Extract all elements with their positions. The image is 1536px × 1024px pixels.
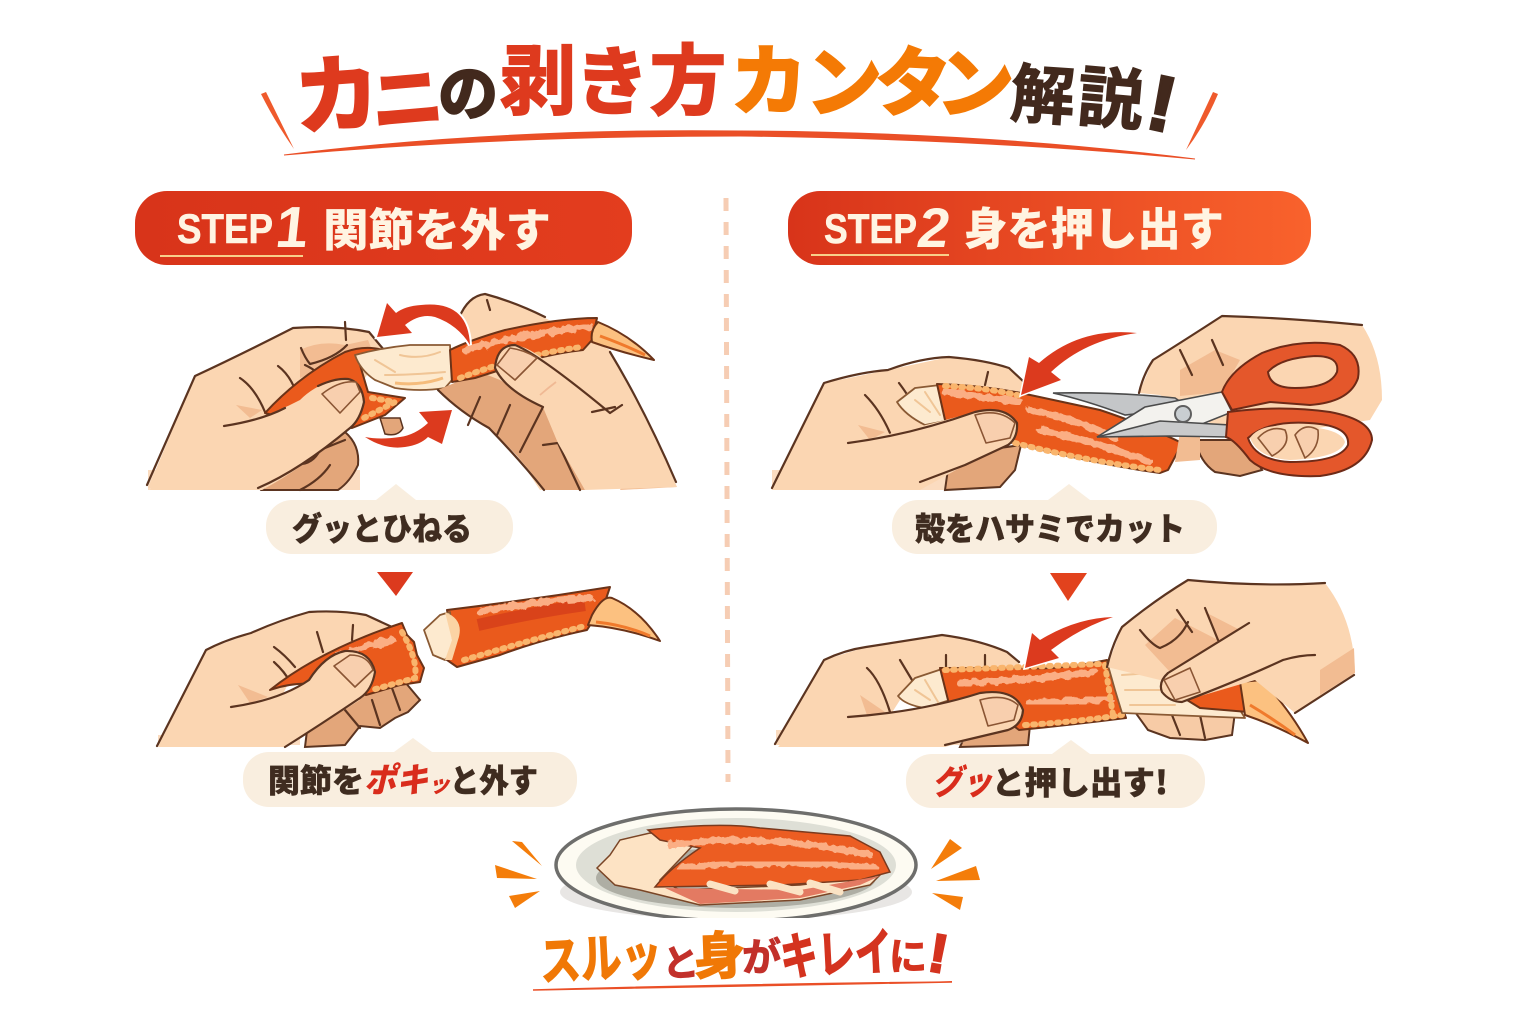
title: カニの剥き方カンタン解説!: 剥 bbox=[500, 40, 576, 125]
held crab shell bbox=[270, 623, 424, 695]
panel: step 1 header: 1 bbox=[273, 195, 312, 260]
illustration: plate with crab meat bbox=[556, 809, 916, 926]
panel: step 2 header: STEP bbox=[824, 205, 917, 252]
result text: スルッと身がキレイに!: が bbox=[742, 937, 781, 980]
right thumb bbox=[495, 345, 677, 490]
left hand holding shell bbox=[157, 611, 420, 747]
panel: step 1 twist illustration bbox=[147, 294, 677, 490]
title: カニの剥き方カンタン解説!: き bbox=[575, 41, 649, 124]
twist arrows bbox=[365, 303, 470, 448]
result text: スルッと身がキレイに!: スルッ bbox=[539, 928, 663, 992]
bent finger behind bbox=[380, 418, 403, 435]
crab shell left bbox=[265, 348, 405, 428]
left thumb bbox=[775, 410, 1017, 490]
plate bbox=[556, 809, 916, 926]
title: カニの剥き方カンタン解説!: 解 bbox=[1008, 58, 1077, 134]
callout: グッとひねる: グッとひねる bbox=[292, 504, 472, 550]
arrow: step 1 down bbox=[377, 572, 413, 596]
callout: 関節をポキッと外す: ッ bbox=[428, 767, 451, 799]
panel: step 2 header: 2 bbox=[917, 196, 949, 259]
crab meat bbox=[355, 345, 452, 390]
callout: 関節をポキッと外す: と外す bbox=[450, 756, 538, 802]
panel: step 2 header: 身を押し出す bbox=[964, 193, 1224, 258]
icon: sparkle left bbox=[495, 841, 542, 908]
thumb bbox=[158, 651, 375, 747]
callout: グッと押し出す!: と押し出す! bbox=[992, 758, 1168, 804]
crab body bbox=[898, 660, 1126, 730]
push arrow bbox=[1025, 617, 1113, 668]
result text: スルッと身がキレイに!: と bbox=[661, 942, 700, 985]
left thumb bbox=[778, 692, 1023, 747]
title: カニの剥き方カンタン解説!: カ bbox=[731, 40, 807, 125]
cut arrow bbox=[1021, 332, 1137, 395]
center divider bbox=[726, 198, 728, 782]
crab leg meat bbox=[597, 825, 890, 905]
title: カニの剥き方カンタン解説!: の bbox=[438, 61, 498, 128]
crab claw segment bbox=[450, 318, 654, 382]
title: カニの剥き方カンタン解説!: 方 bbox=[650, 40, 726, 125]
title: カニの剥き方カンタン解説!: 説 bbox=[1075, 59, 1147, 139]
left thumb bbox=[150, 378, 364, 490]
panel: step 1 header: 関節を外す bbox=[323, 194, 551, 259]
scissors bbox=[1053, 343, 1372, 476]
callout: グッとひねる bbox=[266, 484, 513, 554]
right hand bbox=[438, 294, 677, 490]
fingers and meat right bbox=[1107, 658, 1308, 743]
callout: 殻をハサミでカット: 殻をハサミでカット bbox=[915, 504, 1185, 550]
crab shell, cut bbox=[897, 384, 1182, 473]
result text: スルッと身がキレイに!: に bbox=[889, 937, 927, 979]
callout: グッと押し出す! bbox=[906, 740, 1205, 808]
panel: step 2 push out illustration bbox=[775, 580, 1355, 747]
bottom handle bbox=[1226, 408, 1372, 476]
top handle bbox=[1222, 343, 1359, 410]
left hand bbox=[775, 635, 1030, 747]
title: カニの剥き方カンタン解説!: ニ bbox=[369, 58, 446, 142]
title: カニの剥き方カンタン解説! bbox=[292, 40, 1184, 149]
panel: step 1 header: STEP bbox=[177, 205, 273, 252]
left hand bbox=[147, 322, 384, 490]
title: カニの剥き方カンタン解説!: タ bbox=[873, 40, 953, 129]
panel: step 1 separated illustration bbox=[157, 587, 660, 747]
title: カニの剥き方カンタン解説!: ン bbox=[806, 42, 882, 127]
claw piece bbox=[424, 587, 660, 667]
callout: 関節をポキッと外す: ポキ bbox=[364, 753, 428, 802]
title: カニの剥き方カンタン解説!: ン bbox=[935, 42, 1016, 132]
left hand bbox=[772, 357, 1024, 490]
title: カニの剥き方カンタン解説!: ! bbox=[1140, 58, 1184, 149]
arrow: step 2 down bbox=[1050, 573, 1087, 601]
result text: スルッと身がキレイに! bbox=[539, 923, 952, 992]
panel: step 2 cutting illustration bbox=[772, 315, 1382, 490]
result text: スルッと身がキレイに!: 身 bbox=[693, 927, 746, 986]
result text: スルッと身がキレイに!: ! bbox=[924, 923, 952, 985]
right hand bbox=[1107, 580, 1355, 713]
panel: step 2 header bbox=[788, 191, 1311, 265]
callout: 関節をポキッと外す: 関節を bbox=[268, 756, 364, 802]
icon: sparkle right bbox=[931, 839, 980, 910]
result underline bbox=[533, 982, 952, 990]
panel: step 1 header bbox=[135, 191, 632, 265]
callout: 殻をハサミでカット bbox=[892, 484, 1217, 554]
title: カニの剥き方カンタン解説!: カ bbox=[292, 46, 382, 146]
title underline and accents bbox=[261, 92, 1218, 159]
right hand bbox=[1139, 315, 1382, 476]
callout: 関節をポキッと外す bbox=[243, 738, 577, 807]
callout: グッと押し出す!: グッ bbox=[932, 755, 993, 804]
result text: スルッと身がキレイに!: キレイ bbox=[779, 924, 894, 986]
